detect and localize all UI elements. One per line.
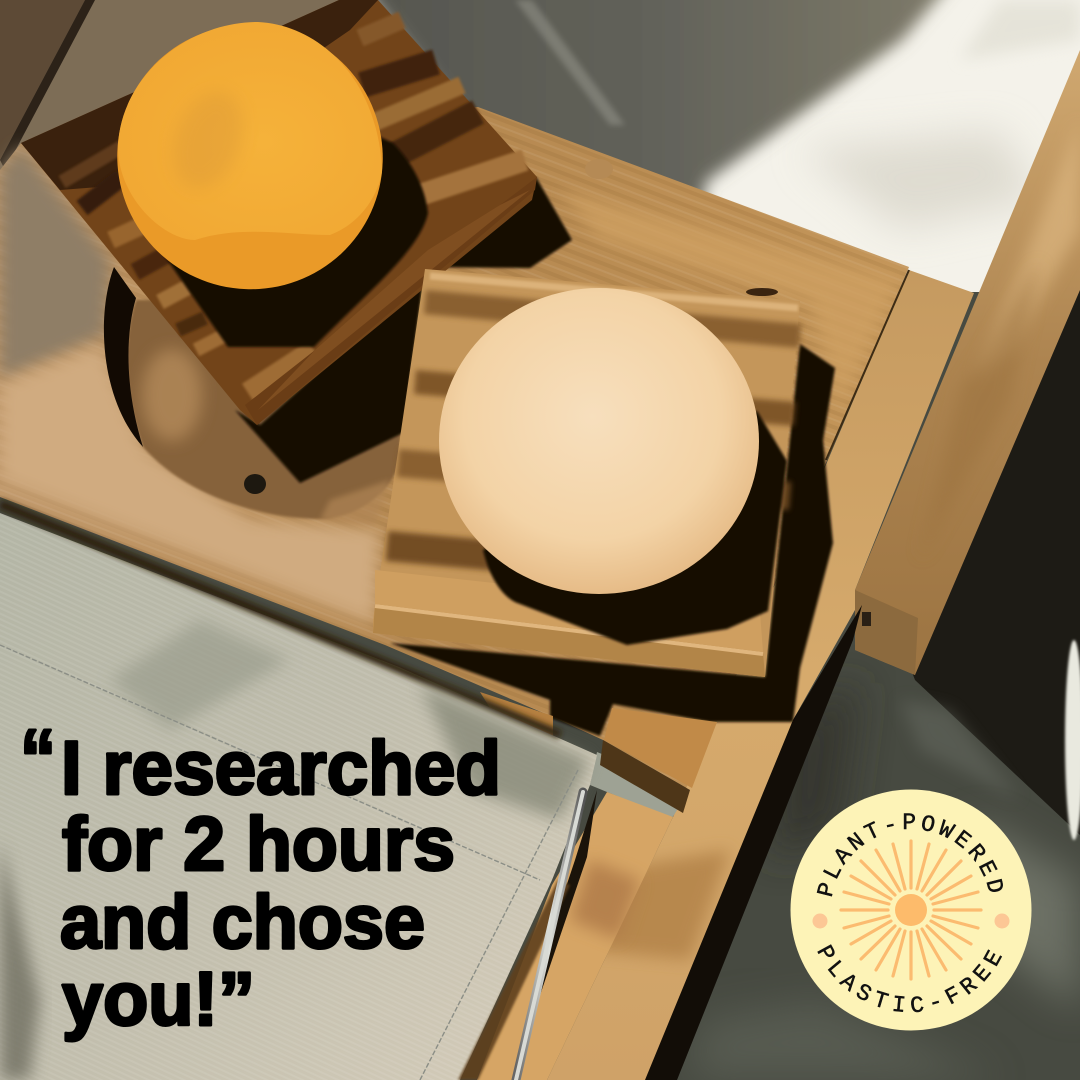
right dot bbox=[994, 914, 1010, 928]
badge text top: PLANT-POWERED bbox=[816, 813, 1003, 896]
shadow of pale bar bbox=[483, 411, 787, 645]
knot on board bbox=[746, 288, 778, 296]
circular shadow on board bbox=[127, 300, 400, 519]
line 4: you!” bbox=[62, 957, 255, 1042]
left dot bbox=[812, 914, 828, 928]
water droplet bbox=[585, 159, 613, 179]
dark gap beside rail bbox=[645, 605, 862, 1080]
line 3: and chose bbox=[60, 880, 425, 965]
opening quotation mark: “ bbox=[20, 713, 56, 804]
far right bamboo rail bbox=[855, 50, 1080, 675]
badge text bottom: PLASTIC-FREE bbox=[817, 944, 1002, 1012]
gap under board bbox=[590, 752, 690, 818]
lower board front face bbox=[600, 740, 690, 813]
quote headline bbox=[20, 713, 501, 1042]
small lower wood strip bbox=[477, 792, 673, 1080]
top-left planks bbox=[0, 0, 360, 200]
wooden soap dish, light, centre bbox=[373, 269, 800, 677]
badge: plant-powered plastic-free bbox=[790, 790, 1032, 1030]
metal straw bbox=[458, 790, 597, 1080]
wooden soap dish, dark, top left bbox=[21, 0, 537, 425]
shadow of dark dish bbox=[235, 177, 572, 483]
shadow of pale dish bbox=[390, 344, 835, 736]
badge disc bbox=[790, 790, 1032, 1030]
pale shampoo bar bbox=[439, 288, 759, 594]
line 1: I researched bbox=[61, 726, 501, 811]
orange shampoo bar bbox=[69, 0, 431, 338]
icon: sun bbox=[841, 841, 981, 979]
line 2: for 2 hours bbox=[62, 802, 455, 887]
main bamboo board bbox=[0, 107, 909, 790]
cloth with stitching bbox=[0, 504, 597, 1080]
shadow of orange bar bbox=[150, 100, 428, 347]
front bamboo rail bbox=[547, 270, 974, 1080]
cast shadows bbox=[235, 177, 835, 788]
